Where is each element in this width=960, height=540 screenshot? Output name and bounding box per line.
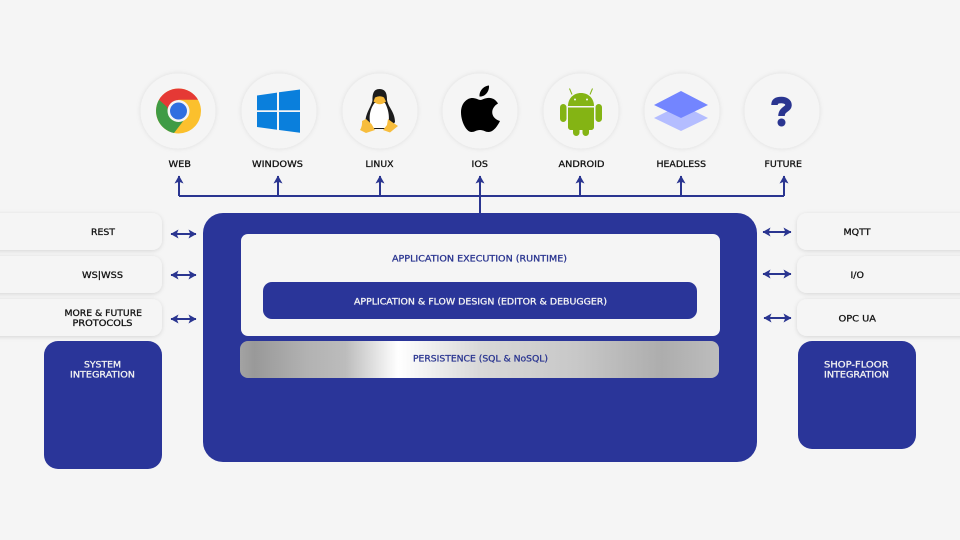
panel: shop-floor integration	[798, 341, 916, 449]
panel: system integration: INTEGRATION	[70, 370, 135, 380]
platform labels: WEB	[168, 160, 191, 170]
panel: protocol pills left: MORE & FUTURE	[64, 309, 142, 319]
panel: shop-floor integration: SHOP-FLOOR	[824, 360, 888, 370]
platform labels: WINDOWS	[252, 160, 303, 170]
platform labels: FUTURE	[764, 160, 802, 170]
panel: protocol pills right: MQTT	[844, 228, 871, 238]
panel: persistence: PERSISTENCE (SQL & NoSQL)	[413, 354, 548, 364]
panel: persistence	[240, 341, 719, 378]
arrows: runtime to platforms	[179, 176, 784, 214]
icon: windows	[242, 74, 316, 148]
panel: protocol pills left: REST	[91, 228, 116, 238]
panel: core platform	[203, 213, 757, 462]
panel: shop-floor integration: INTEGRATION	[824, 370, 889, 380]
panel: protocol pills right: I/O	[850, 271, 864, 281]
panel: protocol pills left: WS|WSS	[82, 271, 123, 281]
panel: system integration	[44, 341, 162, 469]
icon: ios apple	[442, 74, 518, 148]
panel: protocol pills right	[797, 213, 960, 336]
platform labels: ANDROID	[558, 160, 605, 170]
panel: application execution: APPLICATION EXECUTION (RUNTIME)	[392, 254, 567, 264]
panel: protocol pills left	[0, 213, 162, 336]
panel: application execution	[241, 234, 720, 336]
platform labels	[168, 160, 802, 170]
platform labels: HEADLESS	[656, 160, 706, 170]
icon: android	[544, 74, 618, 148]
panel: protocol pills right: OPC UA	[838, 314, 877, 324]
panel: system integration: SYSTEM	[84, 360, 121, 370]
icon: future question mark	[744, 74, 820, 148]
icon: linux penguin	[342, 74, 418, 148]
arrows: right protocols	[763, 232, 791, 318]
arrows: left protocols	[171, 234, 196, 319]
panel: application and flow design: APPLICATION & FLOW DESIGN (EDITOR & DEBUGGER)	[354, 298, 607, 308]
panel: protocol pills left: PROTOCOLS	[72, 319, 133, 329]
icon: web (chrome)	[140, 74, 216, 148]
platform labels: IOS	[472, 160, 488, 170]
platform labels: LINUX	[366, 160, 394, 170]
icon: headless layers	[644, 74, 720, 148]
panel: application and flow design	[263, 282, 697, 319]
